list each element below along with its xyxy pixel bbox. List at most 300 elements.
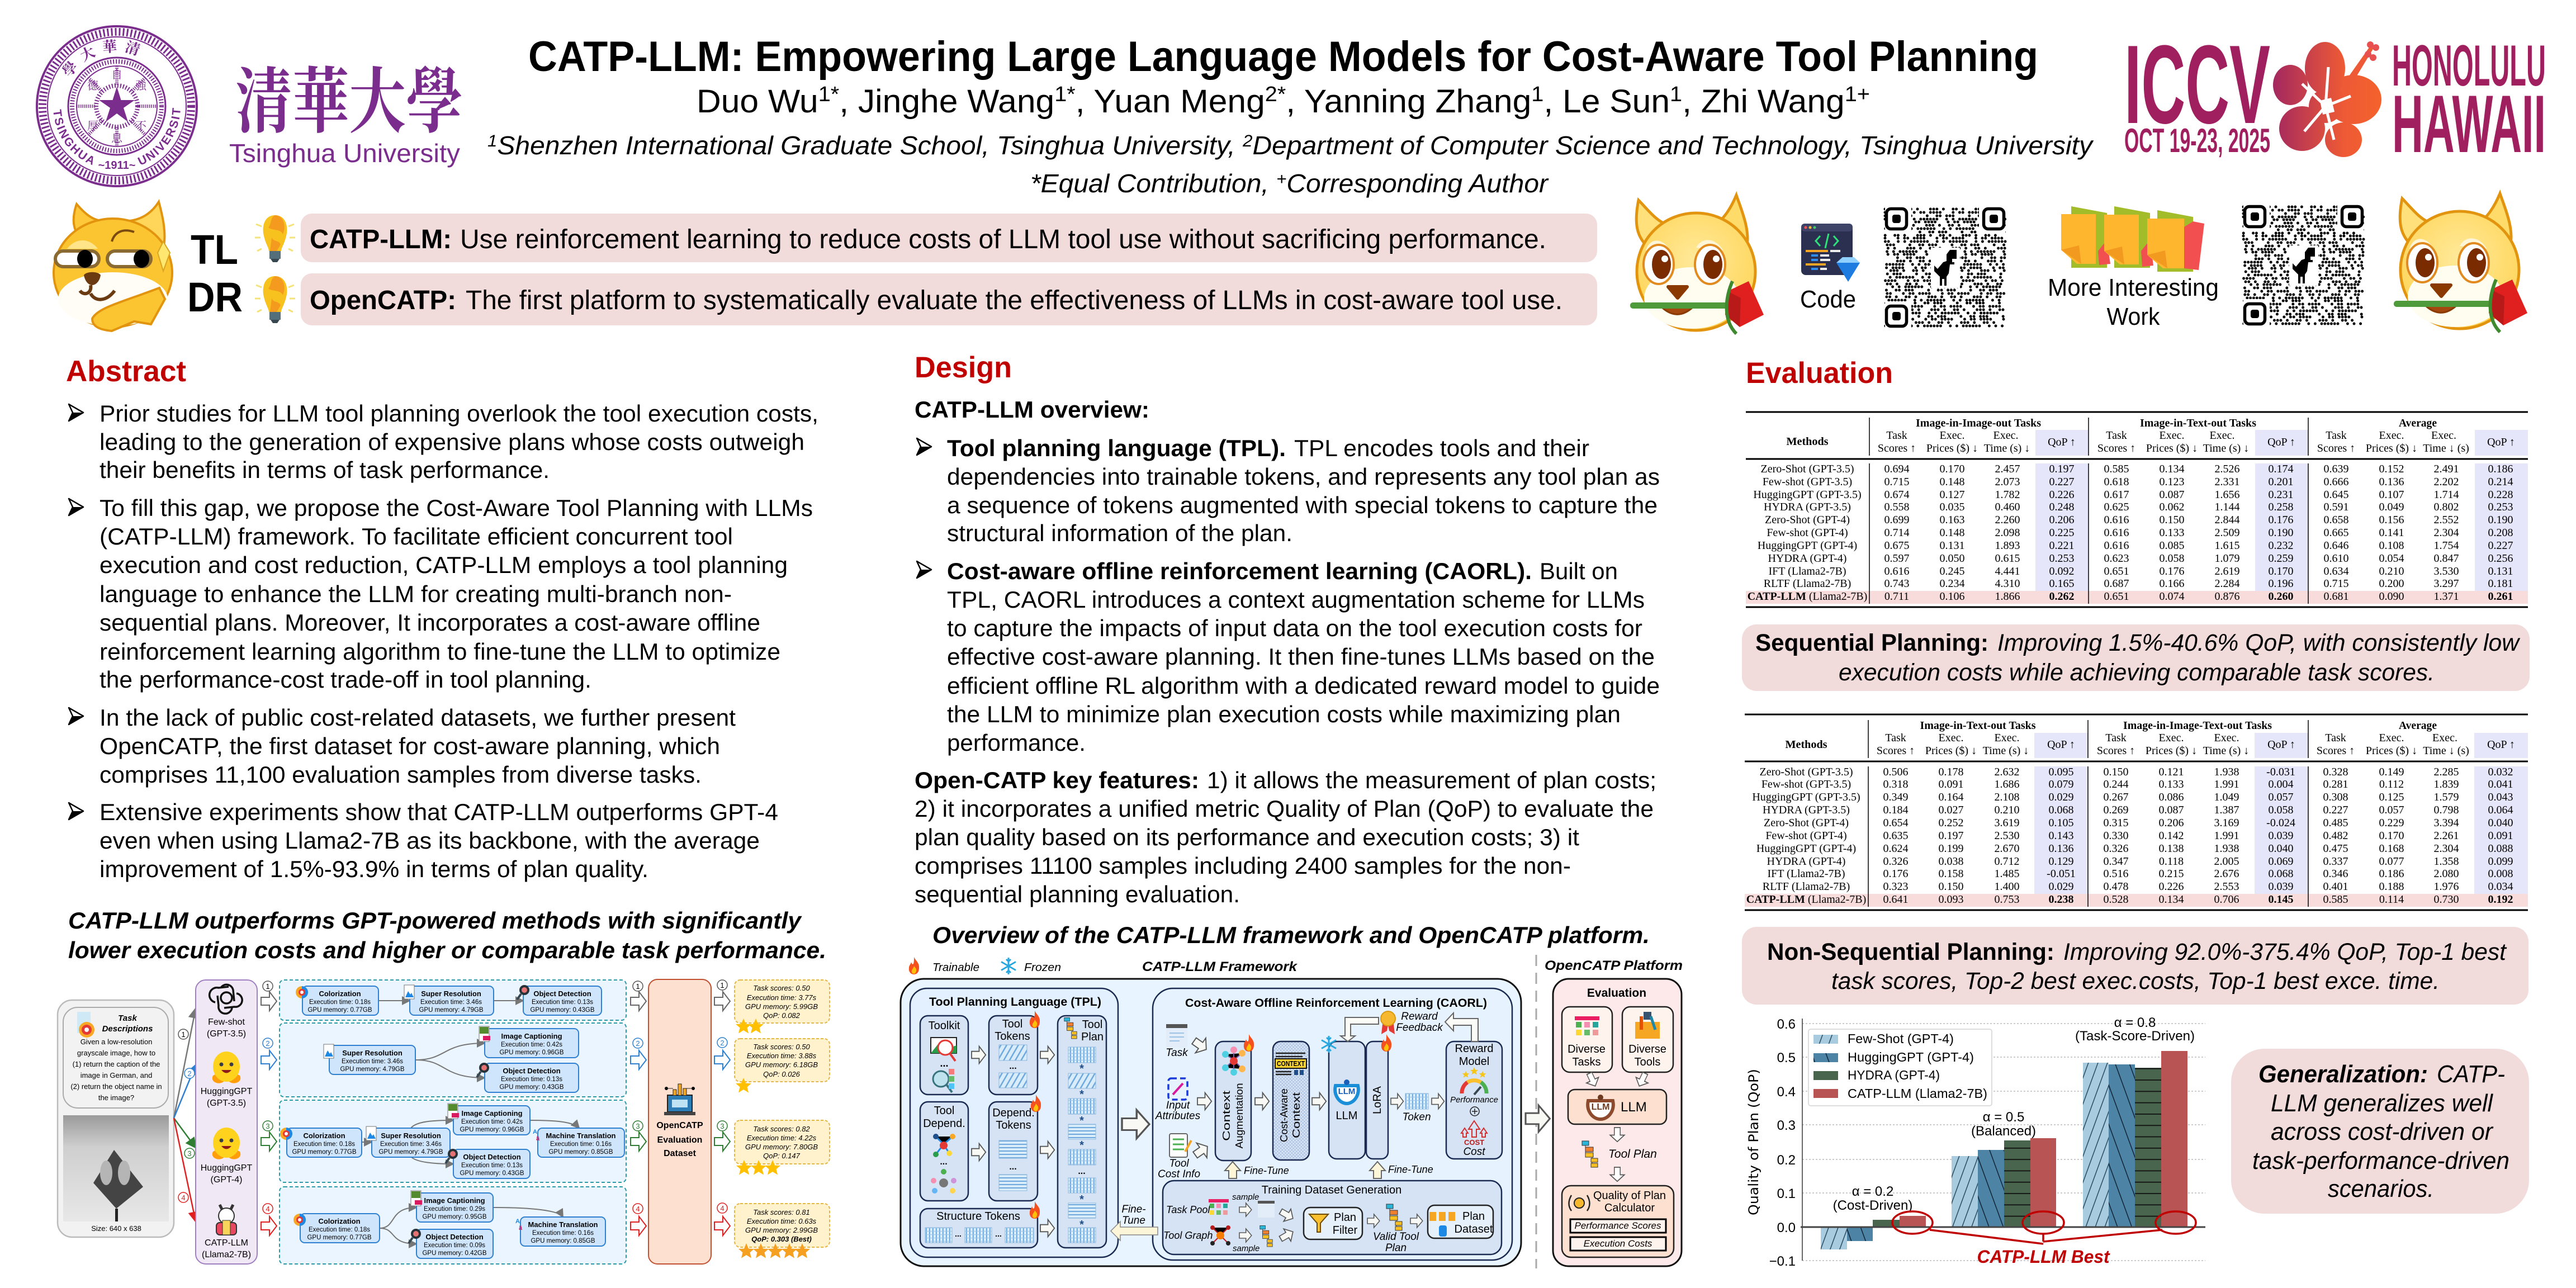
text: abstract bullet 2: reinforcement learning algorithm to fine-tune the LLM to optimize (100, 638, 780, 665)
callout: generalization (2231, 1049, 2529, 1214)
QR code: more work (2243, 205, 2364, 325)
result: plan 4 best: QoP: 0.303 (Best) (751, 1235, 812, 1243)
data rows: Few-shot (GPT-3.5) (1761, 778, 1851, 790)
data rows: 0.143 (2048, 830, 2074, 842)
header row: QoP ↑ (2267, 436, 2295, 448)
legend: trainable and frozen: Frozen (1024, 962, 1061, 974)
tool plan: Tool Plan (1608, 1148, 1657, 1161)
contribution note: Corresponding Author (1286, 169, 1549, 198)
data rows: 0.651 (2104, 565, 2129, 577)
data rows: 0.188 (2379, 880, 2404, 893)
text: Few-shot (207, 1017, 246, 1039)
tool: Machine Translation: Machine Translation (528, 1220, 598, 1229)
text: fine-tune labels: Fine-Tune (1244, 1165, 1289, 1176)
result: plan 2: Execution time: 3.88s (747, 1052, 817, 1060)
callout: generalization: CATP- (2437, 1060, 2505, 1088)
header row: QoP ↑ (2267, 738, 2295, 751)
header row: Exec. (2160, 429, 2184, 442)
box: tool plan: * (1079, 1219, 1084, 1231)
header row: Time (s) ↓ (1983, 745, 2029, 757)
data rows: 1.938 (2214, 842, 2239, 855)
box: diverse tasks (1562, 1007, 1612, 1072)
data rows: 1.358 (2434, 855, 2459, 868)
annotation: alpha labels: (Cost-Driven) (1833, 1198, 1912, 1213)
data rows: 0.142 (2159, 830, 2184, 842)
data rows: 1.485 (1995, 868, 2019, 880)
arrow: LLM to plan (1610, 1128, 1625, 1142)
callout: CATP-LLM summary: CATP-LLM: (310, 225, 452, 254)
arrow: plan to calculator (1610, 1167, 1625, 1181)
data rows: 0.234 (1940, 577, 1964, 590)
heading: TPL: Tool Planning Language (TPL) (929, 996, 1101, 1008)
data rows: 0.315 (2103, 817, 2129, 829)
data rows: 0.127 (1940, 489, 1964, 501)
data rows: 0.323 (1883, 880, 1909, 893)
box: tool plan: * (1079, 1194, 1084, 1206)
arrow: context to LLM (1312, 1093, 1326, 1110)
data rows: 0.694 (1884, 463, 1910, 475)
bars: cost-driven (1821, 1216, 1926, 1249)
authors: , Yanning Zhang (1286, 83, 1531, 120)
logo: Tsinghua seal: 學大華清 (61, 39, 141, 76)
tool: Super Resolution: Super Resolution (421, 989, 481, 998)
arrows: TPL flow (972, 1046, 1054, 1237)
axis ticks: 0.5 (1777, 1050, 1796, 1066)
header row: Exec. (2432, 732, 2457, 744)
annotation: alpha labels: α = 0.8 (2114, 1015, 2156, 1030)
data rows: 2.457 (1995, 463, 2020, 475)
TLDR banner (54, 193, 2527, 334)
header row: QoP ↑ (2047, 738, 2075, 751)
data rows: 0.050 (1940, 552, 1964, 565)
header row (1787, 417, 2515, 454)
tool: Colorization: GPU memory: 0.77GB (307, 1234, 372, 1241)
row: tool graph (1163, 1225, 1272, 1253)
tool: Colorization: Execution time: 0.18s (293, 1141, 355, 1148)
box: toolkit (920, 1016, 968, 1095)
text: abstract bullet 4: even when using Llama2-7B as its backbone, with the average (100, 827, 760, 854)
data rows: 0.330 (2103, 830, 2129, 842)
diagram: case study comparison (58, 979, 830, 1264)
header row: Scores ↑ (1878, 442, 1916, 454)
data rows: HuggingGPT (GPT-4) (1758, 539, 1857, 552)
text: abstract bullet 2: execution and cost reduction, CATP-LLM employs a tool planning (100, 552, 788, 578)
row: task pool (1166, 1192, 1275, 1218)
box: reward model (1446, 1041, 1502, 1159)
legend (1808, 1029, 1992, 1106)
text: abstract bullet 4: improvement of 1.5%-93.9% in terms of plan quality. (100, 856, 648, 882)
data rows: 0.558 (1884, 501, 1910, 513)
labels: flow numbers: 3 (720, 1122, 724, 1130)
result: plan 3: QoP: 0.147 (763, 1152, 801, 1160)
text: CAORL bullet: to capture the impacts of input data on the tool execution costs for (947, 615, 1642, 641)
panel: tool planning language (910, 988, 1118, 1257)
data rows: 1.686 (1995, 778, 2019, 790)
data rows: 0.262 (2049, 590, 2074, 603)
text: Few-shot: (GPT-3.5) (207, 1029, 246, 1039)
tool: Image Captioning: GPU memory: 0.95GB (422, 1214, 487, 1220)
axis ticks: 0.2 (1777, 1153, 1796, 1168)
icon: llama (216, 1205, 236, 1235)
token (1402, 1093, 1431, 1123)
heading: platform: OpenCATP Platform (1545, 958, 1683, 973)
data rows: 0.034 (2488, 880, 2513, 893)
data rows: 0.190 (2488, 514, 2513, 526)
text: dataset name: Evaluation (657, 1135, 702, 1145)
data rows: 0.616 (2104, 539, 2129, 552)
labels: flow numbers: 1 (266, 982, 270, 991)
axis ticks (1769, 1017, 1796, 1269)
input: tool cost: Cost Info (1158, 1168, 1200, 1180)
data rows: 0.008 (2488, 868, 2513, 880)
heading: evaluation: Evaluation (1587, 987, 1646, 1000)
data rows: 0.281 (2323, 778, 2348, 790)
tool: Super Resolution: Execution time: 3.46s (420, 999, 482, 1006)
tool: Image Captioning: Image Captioning (461, 1109, 523, 1117)
data rows: IFT (Llama2-7B) (1768, 565, 1846, 577)
authors: 1+ (1845, 83, 1870, 106)
data rows: 0.190 (2269, 527, 2293, 539)
data rows: 1.782 (1995, 489, 2020, 501)
header row: Scores ↑ (1877, 745, 1915, 757)
table: non-sequential planning (1745, 714, 2528, 910)
labels: method numbers: 4 (181, 1194, 186, 1202)
header row: QoP ↑ (2487, 436, 2515, 448)
data rows: 0.253 (2049, 552, 2074, 565)
text: abstract bullet 3: comprises 11,100 evaluation samples from diverse tasks. (100, 761, 702, 788)
arrow: augmentation to context (1255, 1093, 1269, 1110)
data rows: 0.475 (2323, 842, 2348, 855)
tool: Object Detection (446, 1149, 530, 1178)
tool: Image Captioning (479, 1026, 579, 1058)
header row: Time (s) ↓ (2203, 745, 2249, 757)
text: Open-CATP key features: sequential planning evaluation. (915, 881, 1240, 907)
data rows: 0.666 (2323, 476, 2349, 488)
tool: Colorization (296, 986, 378, 1015)
authors: , Jinghe Wang (839, 83, 1054, 120)
header row: Prices ($) ↓ (1926, 442, 1978, 454)
data rows: 0.088 (2488, 842, 2513, 855)
data rows: 0.730 (2434, 893, 2459, 906)
annotation: alpha labels: (Balanced) (1971, 1124, 2036, 1139)
data rows: 2.304 (2434, 527, 2459, 539)
box: quality of plan calculator: Quality of Plan (1593, 1190, 1666, 1202)
tool: Colorization: Execution time: 0.18s (309, 999, 371, 1006)
box: quality of plan calculator (1562, 1186, 1674, 1257)
data rows: 0.174 (2269, 463, 2293, 475)
data rows: 0.624 (1883, 842, 1909, 855)
data rows: 2.844 (2215, 514, 2239, 526)
icon: code window (1801, 224, 1860, 282)
data rows: HuggingGPT (GPT-3.5) (1752, 791, 1860, 803)
logo: ICCV 2025: OCT 19-23, 2025 (2124, 122, 2270, 159)
data rows: 0.482 (2323, 830, 2348, 842)
panel: training dataset generation (1163, 1181, 1502, 1254)
callout: sequential planning (1742, 624, 2530, 691)
data rows: 0.326 (1883, 855, 1909, 868)
text: TPL bullet: Tool planning language (TPL). (947, 435, 1286, 461)
data rows: 2.304 (2434, 842, 2459, 855)
panel: task input (58, 1000, 174, 1237)
header row: Exec. (2159, 732, 2184, 744)
arrow: reward feedback (1341, 1013, 1478, 1041)
header row: Methods (1787, 435, 1829, 448)
authors: 1 (1670, 83, 1682, 106)
result: plan 1: Execution time: 3.77s (747, 993, 817, 1002)
data rows: 0.227 (2323, 804, 2348, 816)
data rows: 0.625 (2104, 501, 2129, 513)
caption: case study (68, 907, 826, 963)
data rows: 0.206 (2049, 514, 2074, 526)
text: task description: grayscale image, how to (77, 1049, 155, 1057)
bar chart: generalization (1746, 1015, 2205, 1269)
header row: Average (2399, 417, 2437, 429)
data rows: 0.068 (2269, 868, 2293, 880)
labels: flow numbers: 4 (266, 1205, 270, 1213)
data rows: 0.148 (1940, 527, 1964, 539)
text: fine-tune labels: Fine-Tune (1388, 1164, 1433, 1175)
data rows: 0.141 (2379, 527, 2404, 539)
logo: Tsinghua seal: TSINGHUA (54, 109, 93, 165)
box: structure tokens: ... (995, 1229, 1002, 1238)
rating: two stars (736, 1019, 764, 1033)
callout: non-sequential planning: Improving 92.0%-375.4% QoP, Top-1 best (2063, 939, 2507, 965)
arrow: framework to platform (1526, 1105, 1550, 1132)
axis label: Quality of Plan (QoP) (1746, 1069, 1761, 1215)
data rows: 2.509 (2215, 527, 2239, 539)
text: reward feedback (1396, 1011, 1443, 1034)
panel: CAORL (1153, 988, 1512, 1260)
data rows: 0.176 (2269, 514, 2293, 526)
caption: overview figure: Overview of the CATP-LLM framework and OpenCATP platform. (932, 922, 1650, 948)
tool: Image Captioning (448, 1104, 530, 1135)
data rows: 0.068 (2048, 804, 2074, 816)
data rows: 0.057 (2379, 804, 2404, 816)
callout: sequential planning: Improving 1.5%-40.6% QoP, with consistently low (1997, 629, 2521, 656)
data rows: -0.024 (2266, 817, 2295, 829)
tool: Super Resolution: GPU memory: 4.79GB (419, 1007, 484, 1014)
callout: non-sequential planning (1742, 927, 2528, 1005)
panel: evaluation (1742, 357, 2530, 1269)
data rows: 0.210 (2379, 565, 2404, 577)
annotation: alpha labels: α = 0.2 (1852, 1184, 1893, 1199)
data rows: 0.049 (2379, 501, 2404, 513)
tool: Image Captioning: Execution time: 0.42s (461, 1119, 523, 1125)
data rows: 0.150 (1939, 880, 1963, 893)
box: reward model: Reward (1455, 1043, 1493, 1055)
text: CAORL bullet: the LLM to minimize plan execution costs while maximizing plan (947, 701, 1621, 727)
data rows: 0.616 (2104, 514, 2129, 526)
tool: Object Detection: GPU memory: 0.42GB (422, 1250, 487, 1257)
callout: generalization: Generalization: (2258, 1060, 2428, 1088)
tool: Object Detection: Object Detection (533, 989, 591, 998)
authors: , Le Sun (1543, 83, 1670, 120)
box: structure tokens (920, 1209, 1038, 1248)
data rows: 0.645 (2323, 489, 2349, 501)
text: CAORL bullet: TPL, CAORL introduces a context augmentation scheme for LLMs (947, 586, 1645, 613)
box: tool plan: * (1079, 1088, 1084, 1101)
tool: Image Captioning: Execution time: 0.29s (424, 1206, 485, 1213)
row: task pool: Task Pool (1166, 1204, 1210, 1215)
data rows: 0.178 (1939, 766, 1963, 778)
data rows: 0.635 (1883, 830, 1909, 842)
data rows: 0.077 (2379, 855, 2404, 868)
icon and text: valid tool plan (1373, 1204, 1419, 1254)
data rows: 0.186 (2488, 463, 2513, 475)
data rows: 2.261 (2434, 830, 2459, 842)
tool: Super Resolution (404, 985, 494, 1015)
text: abstract bullet 1 (100, 400, 818, 483)
arrow: filter to valid plan (1367, 1214, 1380, 1228)
data rows: 4.441 (1995, 565, 2020, 577)
data rows: 0.150 (2103, 766, 2129, 778)
data rows: 0.258 (2269, 501, 2293, 513)
data rows: 0.238 (2048, 893, 2074, 906)
data rows: 0.485 (2323, 817, 2348, 829)
header row: Prices ($) ↓ (2146, 442, 2198, 454)
bullet markers (69, 404, 83, 820)
data rows: 1.615 (2215, 539, 2239, 552)
data rows: 0.252 (1939, 817, 1963, 829)
bullet markers (917, 438, 931, 578)
input: tool cost (1158, 1134, 1200, 1180)
icon: hugging face 1 (212, 1052, 240, 1083)
axis ticks: 0.0 (1777, 1220, 1796, 1235)
data rows: IFT (Llama2-7B) (1767, 868, 1845, 880)
box: cost-aware context (1273, 1041, 1309, 1160)
affiliations: 2 (1242, 132, 1253, 150)
data rows: 2.202 (2434, 476, 2459, 488)
input: tool cost: Tool (1169, 1158, 1189, 1169)
header row: Prices ($) ↓ (2366, 442, 2417, 454)
callout: CATP-LLM summary (301, 214, 1597, 262)
box: structure tokens: Structure Tokens (936, 1210, 1020, 1223)
data rows: 0.131 (2488, 565, 2513, 577)
result: plan 1: GPU memory: 5.99GB (745, 1002, 818, 1011)
text: task descriptions heading (102, 1014, 153, 1034)
header row: Exec. (2214, 732, 2239, 744)
logo: Tsinghua Chinese name: 清華大學 (235, 44, 463, 147)
box: reward model: Model (1459, 1055, 1489, 1068)
arrow: fine-tune to tool plan: Fine- (1121, 1204, 1146, 1215)
arrows: flow between columns (261, 992, 730, 1235)
tool: Machine Translation (515, 1217, 605, 1246)
box: toolkit: Toolkit (929, 1020, 960, 1032)
text: Open-CATP key features (915, 767, 1656, 907)
data rows: 0.086 (2159, 791, 2184, 803)
data rows (1746, 766, 2513, 906)
box: plan filter: Plan (1334, 1211, 1356, 1224)
data rows: 0.136 (2379, 476, 2404, 488)
header row: Prices ($) ↓ (2366, 745, 2417, 757)
data rows: HuggingGPT (GPT-3.5) (1753, 489, 1862, 501)
data rows: 0.641 (1883, 893, 1909, 906)
text: image size: Size: 640 x 638 (91, 1224, 141, 1233)
text: reward feedback: Reward (1401, 1011, 1438, 1022)
box: reward model: Performance (1450, 1095, 1498, 1105)
data rows: 0.847 (2434, 552, 2459, 565)
text: CAORL bullet: efficient offline RL algorithm with a dedicated reward model to guide (947, 673, 1660, 699)
text: TPL bullet (947, 435, 1660, 546)
data rows: 1.144 (2215, 501, 2239, 513)
data rows: 0.618 (2104, 476, 2129, 488)
box: diverse tools: Tools (1635, 1056, 1660, 1068)
data rows: 0.058 (2269, 804, 2293, 816)
callout: generalization: across cost-driven or (2271, 1118, 2494, 1145)
box: quality of plan calculator: Calculator (1604, 1202, 1655, 1214)
data rows: RLTF (Llama2-7B) (1763, 880, 1850, 893)
icon: thinking doge (54, 202, 172, 331)
data rows: 0.658 (2323, 514, 2349, 526)
data rows: Zero-Shot (GPT-4) (1765, 514, 1850, 526)
icon: rose doge left (1630, 195, 1764, 334)
text: abstract bullet 3: OpenCATP, the first dataset for cost-aware planning, which (100, 733, 720, 759)
header row (1786, 719, 2515, 757)
header row: Exec. (1939, 732, 1963, 744)
data rows: 0.199 (1939, 842, 1963, 855)
contribution note: *Equal Contribution, (1030, 169, 1259, 198)
panel: OpenCATP evaluation dataset (648, 979, 711, 1264)
data rows: 0.654 (1883, 817, 1909, 829)
box: context augmentation: Augmentation (1234, 1083, 1245, 1148)
panel: abstract (66, 355, 826, 963)
labels: flow numbers: 1 (636, 982, 640, 991)
data rows: 0.267 (2103, 791, 2129, 803)
box: plan filter: Filter (1333, 1224, 1358, 1237)
icons: trainable flames (1030, 1011, 1041, 1219)
labels: method numbers: 1 (181, 1030, 186, 1039)
tool: Image Captioning: GPU memory: 0.96GB (499, 1049, 564, 1056)
text: TPL bullet: TPL encodes tools and their (1294, 435, 1589, 461)
tool: Object Detection: Object Detection (463, 1153, 521, 1161)
data rows: 0.074 (2159, 590, 2185, 603)
data rows: 0.032 (2488, 766, 2513, 778)
callout: sequential planning: execution costs while achieving comparable task scores. (1839, 659, 2435, 686)
data rows: 2.553 (2214, 880, 2239, 893)
tool: Machine Translation: GPU memory: 0.85GB (531, 1238, 595, 1244)
data rows: 1.579 (2434, 791, 2459, 803)
labels: flow numbers: 1 (720, 981, 724, 989)
box: cost-aware context: CONTEXT (1277, 1059, 1305, 1068)
data rows: 1.991 (2214, 778, 2239, 790)
data rows: 0.087 (2159, 489, 2185, 501)
header row: Time ↓ (s) (2423, 745, 2469, 757)
tool: Image Captioning: GPU memory: 0.96GB (460, 1126, 524, 1133)
data rows: 0.041 (2488, 778, 2513, 790)
data rows: HYDRA (GPT-3.5) (1764, 501, 1851, 513)
data rows: 2.108 (1995, 791, 2019, 803)
data rows: 2.530 (1995, 830, 2019, 842)
logo: Tsinghua University wordmark: Tsinghua University (229, 139, 460, 168)
data rows: 2.080 (2434, 868, 2459, 880)
data rows: 0.170 (2379, 830, 2404, 842)
text: abstract bullet 3 (100, 704, 736, 788)
data rows: 0.064 (2488, 804, 2513, 816)
data rows: 0.027 (1939, 804, 1963, 816)
data rows: 0.623 (2104, 552, 2129, 565)
text: abstract bullet 4 (100, 799, 778, 882)
data rows: 2.331 (2215, 476, 2239, 488)
input: attributes (1155, 1078, 1201, 1122)
data rows: 0.610 (2323, 552, 2349, 565)
box: reward model: COST (1464, 1138, 1484, 1147)
legend: HYDRA (GPT-4) (1848, 1068, 1940, 1082)
data rows: 0.093 (1939, 893, 1963, 906)
header row: Image-in-Text-out Tasks (2140, 417, 2256, 429)
box: LoRA: LoRA (1371, 1086, 1384, 1114)
data rows: 2.552 (2434, 514, 2459, 526)
tool: Object Detection: Execution time: 0.09s (424, 1242, 485, 1249)
